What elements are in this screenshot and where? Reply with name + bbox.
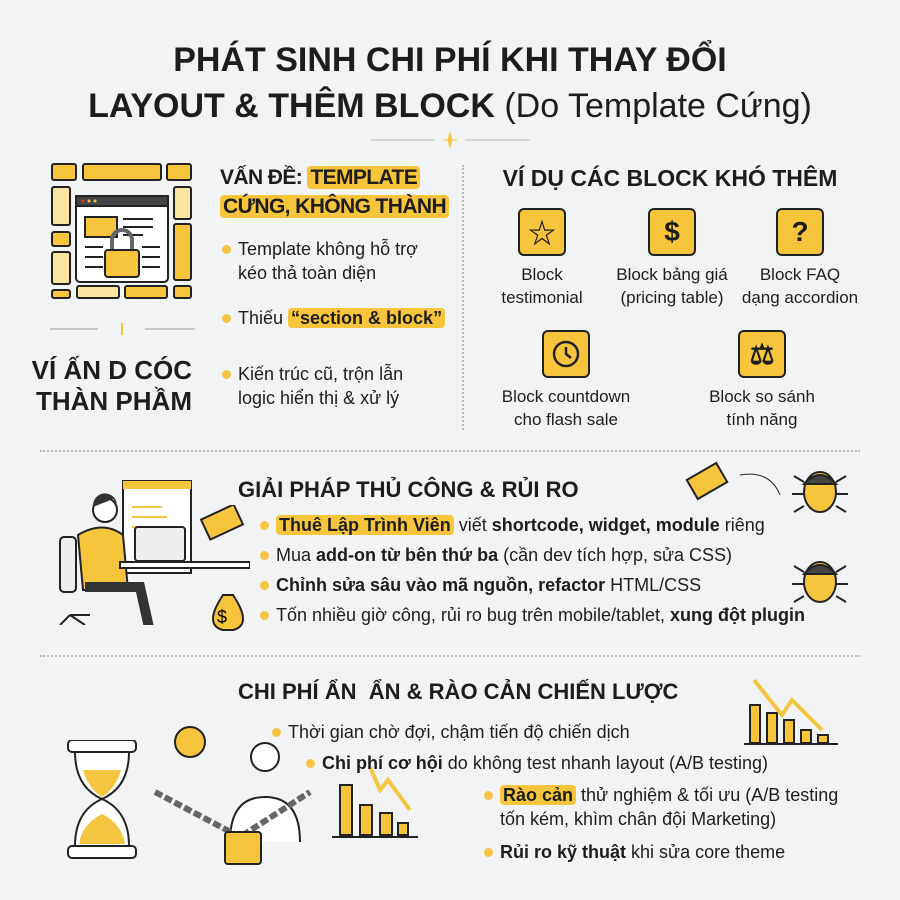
heading: VÍ DỤ CÁC BLOCK KHÓ THÊM (503, 165, 837, 191)
problem bullets (222, 238, 445, 408)
left caption (32, 355, 192, 416)
panel: block examples: Block bảng giá (616, 265, 728, 284)
hidden cost bullets: Rủi ro kỹ thuật khi sửa core theme (500, 842, 785, 862)
problem bullets: Kiến trúc cũ, trộn lẫn (238, 364, 403, 384)
chart icon: small declining bars (332, 766, 418, 838)
hidden cost bullets: Chi phí cơ hội do không test nhanh layout (A/B testing) (322, 753, 768, 773)
panel: block examples (501, 165, 858, 429)
heading: manual solutions: GIẢI PHÁP THỦ CÔNG & RỦI RO (238, 477, 579, 502)
hidden cost bullets (272, 722, 838, 862)
manual bullets (260, 515, 805, 625)
icon: money: $ (217, 607, 227, 627)
problem heading: VẤN ĐỀ: TEMPLATE (220, 166, 417, 189)
icon: bugs (686, 462, 848, 603)
panel: block examples: ? (791, 216, 809, 247)
panel: block examples: cho flash sale (514, 410, 618, 429)
heading: hidden costs: CHI PHÍ ẨN ẨN & RÀO CẢN CHIẾN LƯỢC (238, 679, 678, 704)
left caption: THÀN PHẦM (36, 386, 192, 416)
panel: block examples: ⚖ (749, 338, 775, 370)
chart icon: declining bars (744, 678, 838, 745)
panel: block examples: Block countdown (502, 387, 630, 406)
manual bullets: Chỉnh sửa sâu vào mã nguồn, refactor HTML/CSS (276, 575, 701, 595)
panel: block examples: Block so sánh (709, 387, 815, 406)
icon: chained person (154, 726, 312, 865)
problem bullets: logic hiển thị & xử lý (238, 388, 399, 408)
panel: block examples: Block FAQ (760, 265, 840, 284)
hidden cost bullets: Thời gian chờ đợi, chậm tiến độ chiến dịch (288, 722, 630, 742)
problem bullets: Template không hỗ trợ (238, 239, 418, 259)
icon: hourglass (67, 740, 137, 859)
manual bullets: Tốn nhiều giờ công, rủi ro bug trên mobile/tablet, xung đột plugin (276, 605, 805, 625)
icon: developer at desk (59, 480, 250, 625)
panel: block examples: testimonial (501, 288, 583, 307)
panel: block examples: dạng accordion (742, 288, 858, 307)
hidden cost bullets: Rào cản thử nghiệm & tối ưu (A/B testing (503, 785, 838, 805)
title: LAYOUT & THÊM BLOCK (Do Template Cứng) (88, 87, 812, 125)
title divider (370, 131, 530, 149)
manual bullets: Mua add-on từ bên thứ ba (cần dev tích hợp, sửa CSS) (276, 545, 732, 565)
title: PHÁT SINH CHI PHÍ KHI THAY ĐỔI (173, 41, 727, 79)
left caption: VÍ ẤN D CÓC (32, 355, 192, 385)
problem bullets: kéo thả toàn diện (238, 263, 376, 283)
panel: block examples: tính năng (727, 410, 797, 429)
panel: block examples: ☆ (528, 218, 556, 249)
manual bullets: Thuê Lập Trình Viên viết shortcode, widget, module riêng (279, 515, 765, 535)
small divider (50, 323, 195, 335)
panel: block examples: $ (664, 216, 680, 247)
icon: locked template (51, 163, 192, 299)
hidden cost bullets: tốn kém, khìm chân đội Marketing) (500, 809, 776, 829)
vertical divider (462, 165, 464, 430)
problem heading (220, 165, 449, 218)
title (88, 40, 812, 125)
problem bullets: Thiếu “section & block” (238, 308, 442, 328)
icon: money (200, 505, 244, 631)
problem heading: CỨNG, KHÔNG THÀNH (223, 195, 446, 218)
panel: block examples: (pricing table) (620, 288, 724, 307)
panel: block examples: Block (521, 265, 563, 284)
